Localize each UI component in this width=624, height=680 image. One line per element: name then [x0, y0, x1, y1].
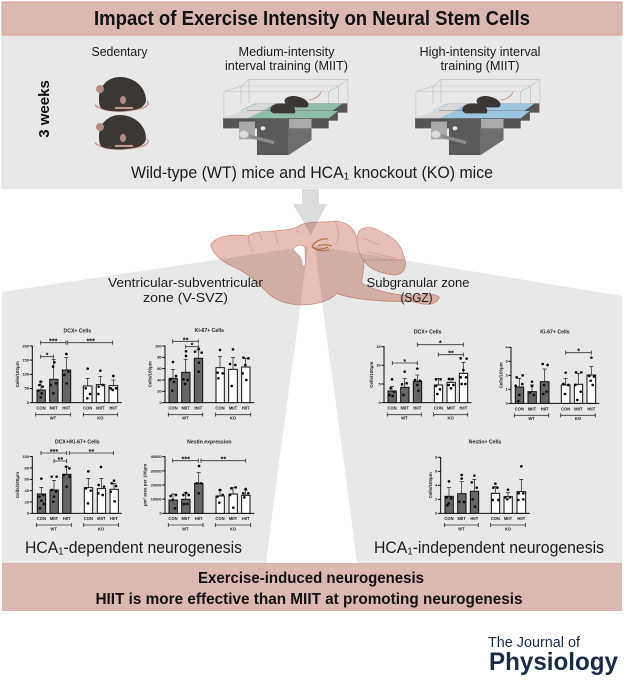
bar chart: DCX+ cells SGZ — [369, 330, 472, 421]
bar chart: Nestin+ cells SGZ: Nestin+ Cells — [469, 440, 501, 446]
bar chart: DCX+ cells V-SVZ: HIIT — [109, 406, 118, 411]
bar chart: Nestin expression V-SVZ: Nestin expression — [187, 439, 232, 445]
bar chart: DCX+ cells V-SVZ: *** — [49, 337, 58, 346]
bar chart: DCX+ cells V-SVZ: HIIT — [62, 406, 71, 411]
bar chart: DCX+/Ki-67+ cells V-SVZ: CON — [37, 516, 46, 521]
bar chart: Ki-67+ cells SGZ: CON — [515, 406, 524, 411]
bar chart: DCX+ cells SGZ: HIIT — [413, 406, 422, 411]
bar chart: Nestin expression V-SVZ: 10000 — [151, 497, 162, 502]
bar chart: DCX+ cells SGZ: 10 — [376, 363, 381, 368]
icon: hippocampus — [312, 239, 332, 251]
bar chart: DCX+/Ki-67+ cells V-SVZ: 60 — [25, 477, 30, 482]
bar chart: DCX+ cells SGZ: HIIT — [459, 406, 468, 411]
caption: mouse strains: Wild-type (WT) mice and HCA₁ knockout (KO) mice — [131, 163, 493, 182]
bar chart: DCX+ cells V-SVZ: *** — [86, 337, 95, 346]
bar chart: DCX+ cells V-SVZ: MIIT — [96, 406, 105, 411]
bar chart: Nestin expression V-SVZ: 20000 — [151, 482, 162, 487]
conclusion banner: Exercise-induced neurogenesis — [198, 570, 424, 587]
chart group: V-SVZ — [15, 328, 254, 531]
bar chart: DCX+ cells SGZ: CON — [387, 406, 397, 411]
bar chart: DCX+/Ki-67+ cells V-SVZ: WT — [50, 526, 57, 531]
bar chart: Ki-67+ cells V-SVZ: 0 — [159, 400, 162, 405]
bar chart: Nestin expression V-SVZ: KO — [230, 526, 237, 531]
bar chart: DCX+/Ki-67+ cells V-SVZ: ** — [88, 447, 94, 456]
bar chart: Ki-67+ cells V-SVZ: CON — [215, 406, 225, 411]
icon: treadmill high intensity — [415, 79, 540, 155]
bar chart: Nestin expression V-SVZ: MIIT — [182, 516, 190, 521]
bar chart: Ki-67+ cells V-SVZ: CON — [168, 406, 178, 411]
bar chart: Ki-67+ cells V-SVZ: HIIT — [194, 406, 203, 411]
bar chart: DCX+ cells SGZ: 15 — [376, 344, 381, 349]
bar chart: DCX+/Ki-67+ cells V-SVZ: HIIT — [63, 516, 71, 521]
bar chart: DCX+ cells SGZ: MIIT — [401, 406, 409, 411]
bar chart: DCX+/Ki-67+ cells V-SVZ — [15, 439, 122, 531]
label: sedentary: Sedentary — [92, 44, 148, 59]
bar chart: Ki-67+ cells SGZ: MIIT — [574, 406, 583, 411]
bar chart: DCX+/Ki-67+ cells V-SVZ: MIIT — [97, 516, 106, 521]
caption: HCA1-independent neurogenesis: HCA₁-independent neurogenesis — [374, 538, 604, 557]
bar chart: Nestin+ cells SGZ: 8 — [435, 455, 438, 460]
bar chart: Nestin expression V-SVZ: ** — [220, 455, 226, 464]
bar chart: Nestin+ cells SGZ: MIIT — [504, 516, 513, 521]
bar chart: DCX+ cells SGZ: 5 — [378, 381, 381, 386]
panel: SGZ background — [315, 246, 622, 563]
bar chart: Nestin+ cells SGZ: Cells/100μm — [428, 472, 433, 498]
bar chart: Ki-67+ cells SGZ: Cells/100μm — [498, 362, 503, 388]
icon: sleeping mouse top — [95, 77, 148, 111]
bar chart: DCX+ cells SGZ: CON — [434, 406, 443, 411]
bar chart: Nestin+ cells SGZ: CON — [444, 516, 454, 521]
title banner — [2, 2, 622, 35]
bar chart: Nestin expression V-SVZ: CON — [168, 516, 178, 521]
panel: experimental design — [2, 35, 621, 188]
bar chart: DCX+ cells SGZ: * — [403, 357, 406, 366]
logo: The Journal of Physiology — [488, 634, 618, 676]
bar chart: Ki-67+ cells V-SVZ: 60 — [157, 366, 162, 371]
label: subgranular zone — [366, 275, 470, 305]
bar chart: Nestin expression V-SVZ: MIIT — [229, 516, 238, 521]
bar chart: DCX+ cells SGZ: DCX+ Cells — [414, 330, 442, 336]
bar chart: Ki-67+ cells V-SVZ: 80 — [157, 355, 162, 360]
conclusion banner: HIIT is more effective than MIIT at promoting neurogenesis — [96, 591, 522, 608]
icon: ventricle — [293, 245, 305, 266]
bar chart: Ki-67+ cells SGZ: Ki-67+ Cells — [540, 330, 570, 336]
bar chart: Nestin expression V-SVZ: HIIT — [242, 516, 250, 521]
bar chart: Nestin+ cells SGZ: 0 — [435, 511, 438, 516]
icon: mouse brain sagittal section — [211, 221, 439, 305]
bar chart: Nestin expression V-SVZ — [143, 439, 254, 531]
chart group: SGZ — [369, 330, 599, 531]
bar chart: Ki-67+ cells SGZ: MIIT — [528, 406, 537, 411]
label: medium-intensity interval training — [225, 44, 348, 73]
bar chart: Ki-67+ cells SGZ: * — [577, 347, 580, 356]
bar chart: DCX+ cells SGZ: ** — [448, 349, 454, 358]
bar chart: Nestin+ cells SGZ: HIIT — [470, 516, 479, 521]
bar chart: Ki-67+ cells V-SVZ — [147, 328, 254, 421]
bar chart: Nestin+ cells SGZ: 2 — [435, 497, 438, 502]
bar chart: DCX+/Ki-67+ cells V-SVZ: 40 — [25, 488, 30, 493]
bar chart: Ki-67+ cells SGZ: 2 — [505, 373, 508, 378]
icon: sleeping mouse bottom — [95, 115, 148, 149]
label: 3 weeks: 3 weeks — [36, 80, 53, 138]
bar chart: DCX+ cells SGZ: KO — [448, 416, 455, 421]
bar chart: DCX+/Ki-67+ cells V-SVZ: ** — [57, 455, 63, 464]
bar chart: Nestin expression V-SVZ: 0 — [159, 511, 162, 516]
bar chart: DCX+ cells V-SVZ: 0 — [27, 400, 30, 405]
bar chart: DCX+ cells SGZ: Cells/100μm — [369, 362, 374, 388]
bar chart: Ki-67+ cells V-SVZ: ** — [183, 335, 189, 344]
bar chart: Ki-67+ cells SGZ: KO — [575, 416, 582, 421]
bar chart: DCX+ cells SGZ: * — [439, 339, 442, 348]
bar chart: DCX+ cells V-SVZ: DCX+ Cells — [64, 329, 91, 335]
bar chart: DCX+/Ki-67+ cells V-SVZ: *** — [50, 447, 58, 456]
bar chart: DCX+ cells V-SVZ: WT — [50, 416, 57, 421]
bar chart: Ki-67+ cells SGZ: 0 — [505, 401, 508, 406]
bar chart: DCX+/Ki-67+ cells V-SVZ: MIIT — [50, 516, 59, 521]
bar chart: Nestin expression V-SVZ: HIIT — [195, 516, 203, 521]
bar chart: Ki-67+ cells SGZ: HIIT — [541, 406, 549, 411]
bar chart: DCX+ cells SGZ: 0 — [378, 400, 381, 405]
bar chart: Ki-67+ cells SGZ: 4 — [505, 345, 508, 350]
bar chart: DCX+/Ki-67+ cells V-SVZ: 0 — [27, 511, 30, 516]
label: subgranular zone: (SGZ) — [400, 290, 432, 305]
bar chart: Ki-67+ cells SGZ — [498, 330, 599, 421]
label: ventricular-subventricular zone: zone (V-SVZ) — [143, 290, 228, 305]
label: subgranular zone: Subgranular zone — [366, 275, 470, 290]
bar chart: Nestin+ cells SGZ — [428, 440, 530, 531]
bar chart: Ki-67+ cells V-SVZ: Cells/100μm — [147, 361, 152, 387]
bar chart: Nestin+ cells SGZ: 6 — [435, 469, 438, 474]
title banner: Impact of Exercise Intensity on Neural Stem Cells — [94, 8, 530, 30]
conclusion banner — [2, 563, 622, 611]
bar chart: Ki-67+ cells SGZ: 3 — [505, 359, 508, 364]
bar chart: Ki-67+ cells V-SVZ: MIIT — [229, 406, 238, 411]
bar chart: DCX+/Ki-67+ cells V-SVZ: DCX+/Ki-67+ Cells — [55, 439, 100, 445]
bar chart: DCX+ cells V-SVZ: 50 — [25, 386, 30, 391]
bar chart: DCX+ cells V-SVZ: Cells/100μm — [15, 361, 20, 387]
label: high-intensity interval training: High-intensity interval — [420, 44, 541, 59]
panel: V-SVZ background — [2, 246, 308, 563]
bar chart: DCX+/Ki-67+ cells V-SVZ: 20 — [25, 499, 30, 504]
bar chart: Nestin expression V-SVZ: μm² area per 100μm — [143, 464, 148, 506]
bar chart: DCX+ cells SGZ: MIIT — [447, 406, 456, 411]
bar chart: DCX+ cells V-SVZ: 100 — [22, 372, 30, 377]
bar chart: DCX+ cells V-SVZ: CON — [83, 406, 92, 411]
arrow: down to brain — [293, 189, 327, 235]
caption: HCA1-dependent neurogenesis: HCA₁-dependent neurogenesis — [25, 538, 242, 557]
bar chart: DCX+ cells V-SVZ: 200 — [22, 343, 30, 348]
bar chart: Ki-67+ cells SGZ: 1 — [505, 387, 508, 392]
bar chart: DCX+/Ki-67+ cells V-SVZ: KO — [98, 526, 105, 531]
bar chart: Ki-67+ cells V-SVZ: 20 — [157, 389, 162, 394]
bar chart: Nestin+ cells SGZ: CON — [491, 516, 500, 521]
label: medium-intensity interval training: interval training (MIIT) — [225, 58, 348, 73]
bar chart: Nestin expression V-SVZ: 40000 — [151, 454, 162, 459]
bar chart: Nestin+ cells SGZ: 4 — [435, 483, 438, 488]
label: ventricular-subventricular zone: Ventricular-subventricular — [108, 275, 264, 290]
bar chart: Nestin+ cells SGZ: MIIT — [458, 516, 466, 521]
logo: The Journal of Physiology: Physiology — [489, 648, 618, 676]
bar chart: DCX+/Ki-67+ cells V-SVZ: CON — [84, 516, 93, 521]
bar chart: Ki-67+ cells V-SVZ: HIIT — [242, 406, 250, 411]
bar chart: Nestin expression V-SVZ: *** — [181, 455, 190, 464]
bar chart: DCX+ cells SGZ: WT — [401, 416, 408, 421]
bar chart: DCX+/Ki-67+ cells V-SVZ: HIIT — [110, 516, 118, 521]
bar chart: DCX+/Ki-67+ cells V-SVZ: 80 — [25, 465, 30, 470]
label: high-intensity interval training: training (MIIT) — [440, 58, 520, 73]
bar chart: Nestin+ cells SGZ: HIIT — [517, 516, 526, 521]
bar chart: DCX+ cells V-SVZ: KO — [97, 416, 104, 421]
label: high-intensity interval training — [420, 44, 541, 73]
bar chart: Ki-67+ cells V-SVZ: 100 — [155, 343, 162, 348]
label: ventricular-subventricular zone — [108, 275, 264, 305]
bar chart: DCX+ cells V-SVZ: 150 — [22, 357, 30, 362]
bar chart: Ki-67+ cells V-SVZ: Ki-67+ Cells — [195, 328, 224, 334]
bar chart: Nestin expression V-SVZ: CON — [215, 516, 225, 521]
bar chart: Nestin expression V-SVZ: 30000 — [151, 468, 162, 473]
bar chart: DCX+/Ki-67+ cells V-SVZ: 100 — [22, 454, 30, 459]
bar chart: DCX+ cells V-SVZ — [15, 329, 122, 421]
bar chart: Ki-67+ cells V-SVZ: * — [191, 341, 194, 350]
bar chart: Ki-67+ cells V-SVZ: 40 — [157, 377, 162, 382]
bar chart: Ki-67+ cells SGZ: HIIT — [587, 406, 596, 411]
bar chart: Ki-67+ cells SGZ: WT — [528, 416, 535, 421]
bar chart: Nestin+ cells SGZ: KO — [505, 526, 512, 531]
label: medium-intensity interval training: Medium-intensity — [238, 44, 335, 59]
logo: The Journal of Physiology: The Journal of — [488, 634, 581, 651]
bar chart: Ki-67+ cells V-SVZ: WT — [182, 416, 189, 421]
bar chart: Nestin expression V-SVZ: WT — [182, 526, 189, 531]
icon: treadmill medium intensity — [223, 79, 348, 155]
bar chart: DCX+ cells V-SVZ: MIIT — [50, 406, 58, 411]
bar chart: Ki-67+ cells SGZ: CON — [561, 406, 570, 411]
bar chart: DCX+ cells V-SVZ: * — [46, 351, 49, 360]
bar chart: DCX+ cells V-SVZ: CON — [36, 406, 46, 411]
bar chart: DCX+/Ki-67+ cells V-SVZ: Cells/100μm — [15, 472, 20, 498]
bar chart: Ki-67+ cells V-SVZ: MIIT — [182, 406, 190, 411]
bar chart: Ki-67+ cells V-SVZ: KO — [230, 416, 237, 421]
bar chart: Nestin+ cells SGZ: WT — [458, 526, 465, 531]
